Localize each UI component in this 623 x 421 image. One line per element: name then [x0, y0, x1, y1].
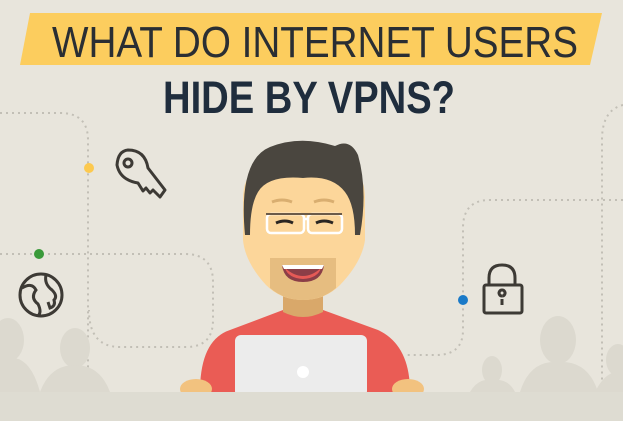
- shirt: [200, 310, 410, 392]
- beard: [270, 258, 336, 300]
- neck: [283, 296, 323, 317]
- subtitle: HIDE BY VPNS?: [163, 72, 455, 123]
- face: [243, 172, 365, 300]
- icon: globe: [20, 274, 62, 316]
- dotted connector lines: [0, 105, 623, 392]
- silhouettes: background crowd: [0, 316, 623, 392]
- laptop: [235, 335, 367, 397]
- eyebrows: [272, 200, 292, 202]
- hands: [180, 379, 212, 399]
- mouth: [282, 265, 324, 282]
- glasses: [267, 214, 342, 233]
- floor: [0, 392, 623, 421]
- person: [180, 141, 424, 399]
- icon: lock: [484, 265, 522, 313]
- icon: key: [117, 150, 165, 197]
- hair: [244, 141, 364, 235]
- dots: [84, 163, 94, 173]
